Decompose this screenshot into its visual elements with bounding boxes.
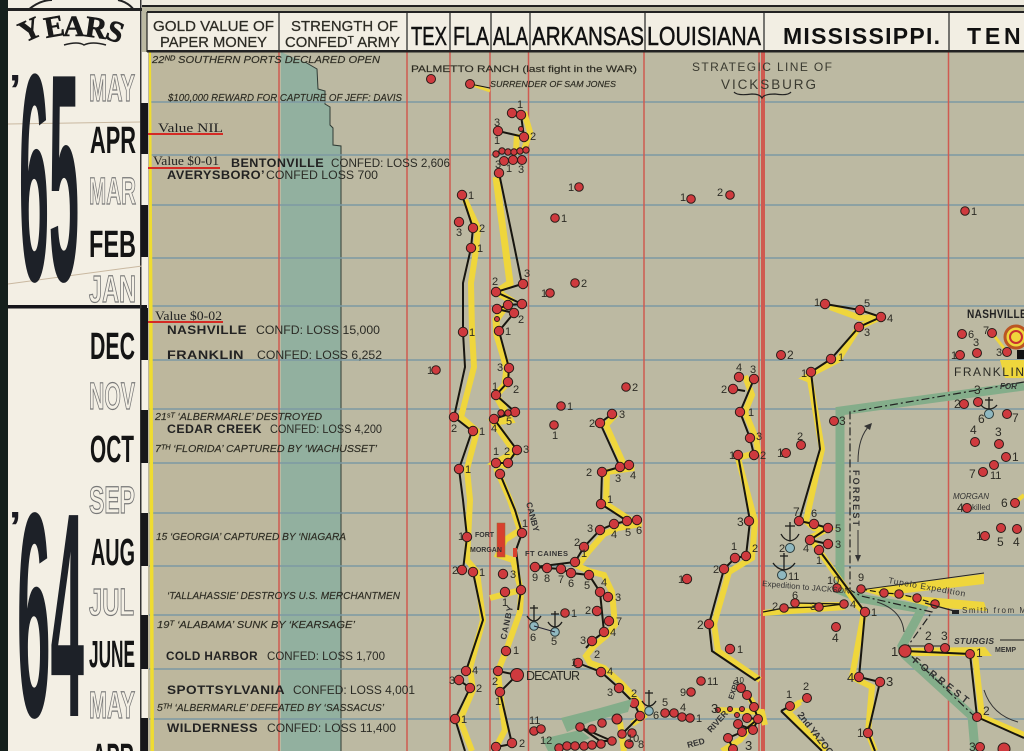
Mississippi campaign track: 4 — [803, 543, 809, 555]
green Forrest band, Arkansas lower: 11 — [529, 715, 540, 727]
Sturgis route and Memphis line: STURGIS — [954, 636, 994, 646]
Louisiana campaign track: 2 — [697, 618, 704, 632]
Tennessee engagements and Nashville: 3 — [974, 383, 981, 397]
Mississippi campaign track: 1 — [814, 297, 820, 309]
Arkansas campaign track: 4 — [610, 627, 616, 639]
year numeral 1865: ’ — [9, 66, 21, 115]
Louisiana campaign track: 2 — [713, 564, 719, 576]
Red River expedition cluster: 9 — [680, 687, 686, 699]
battle and naval notes: CONFD: LOSS 15,000 — [256, 323, 380, 337]
Tennessee engagements and Nashville: 3 — [996, 347, 1002, 359]
left years panel — [0, 0, 148, 751]
Florida campaign track: 4 — [472, 665, 478, 677]
Sturgis route and Memphis line: 1 — [976, 646, 983, 660]
Arkansas campaign track — [530, 409, 645, 734]
strength of Confederate army column — [281, 52, 341, 751]
Louisiana campaign track: 3 — [756, 431, 762, 443]
Arkansas scattered engagements: 2 — [581, 278, 587, 290]
Arkansas campaign track: 5 — [584, 580, 590, 592]
2nd Yazoo route: 1 — [786, 689, 792, 701]
column header row: ARKANSAS — [532, 21, 644, 51]
Arkansas campaign track: 2 — [631, 688, 637, 700]
Arkansas scattered engagements: 1 — [541, 288, 547, 300]
Red River expedition cluster: 1 — [696, 713, 702, 725]
month labels: MAR — [89, 171, 136, 213]
Tennessee engagements and Nashville: killed — [972, 503, 990, 512]
battle and naval notes: SPOTTSYLVANIA — [167, 683, 285, 697]
Alabama campaign track: 2 — [504, 446, 510, 458]
Sturgis route and Memphis line: 2 — [983, 704, 990, 718]
Louisiana campaign track: 1 — [729, 450, 735, 462]
Arkansas scattered engagements: 1 — [561, 213, 567, 225]
Florida campaign track: 1 — [469, 327, 475, 339]
Mississippi campaign track: 5 — [864, 298, 870, 310]
Tennessee engagements and Nashville: 4 — [970, 423, 977, 437]
battle and naval notes: BENTONVILLE — [231, 156, 324, 170]
battle and naval notes: COLD HARBOR — [166, 649, 258, 663]
Palmetto Ranch note: SURRENDER OF SAM JONES — [490, 79, 616, 89]
Expedition to Jackson: 2 — [772, 601, 778, 613]
battle and naval notes: CONFED: LOSS 4,200 — [270, 422, 382, 436]
Arkansas campaign track: 3 — [607, 687, 613, 699]
Mississippi campaign track: 5 — [835, 523, 841, 535]
Arkansas scattered engagements: 1 — [567, 401, 573, 413]
column header row: GOLD VALUE OF — [153, 18, 274, 35]
Tennessee engagements and Nashville: 6 — [968, 329, 974, 341]
month grid lines — [149, 102, 1024, 719]
Mississippi campaign track: 1 — [816, 555, 822, 567]
Arkansas campaign track: 5 — [625, 527, 631, 539]
month labels: MAY — [89, 685, 135, 727]
Arkansas campaign track: 1 — [607, 494, 613, 506]
Expedition to Jackson — [762, 575, 856, 616]
Alabama campaign track: 1 — [493, 446, 499, 458]
Mississippi campaign track: 4 — [887, 313, 893, 325]
Louisiana campaign track: 1 — [678, 574, 684, 586]
Tennessee engagements and Nashville: 4 — [957, 501, 964, 515]
battle and naval notes: CONFED LOSS 700 — [266, 168, 378, 182]
Alabama campaign track: 1 — [513, 645, 519, 657]
Florida campaign track — [449, 190, 485, 751]
green Forrest band, Arkansas lower: 10 — [627, 733, 639, 745]
Fort Morgan and Fort Gaines: FT CAINES — [525, 549, 568, 558]
Alabama campaign track: 2 — [519, 738, 525, 750]
Mississippi scattered engagements and naval anchors — [773, 206, 977, 645]
Tupelo expedition: 9 — [858, 572, 864, 584]
year numeral 1865 — [9, 12, 79, 343]
Palmetto Ranch note — [411, 64, 637, 91]
Expedition to Jackson: 4 — [850, 599, 856, 611]
Arkansas campaign track: 4 — [630, 470, 636, 482]
Mississippi scattered engagements and naval anchors: 4 — [832, 631, 839, 645]
Forrest route, green band: FORREST — [910, 656, 971, 706]
battle and naval notes — [151, 54, 450, 735]
Mississippi campaign track — [793, 297, 893, 751]
Sturgis route and Memphis line: 2 — [925, 629, 932, 643]
2nd Yazoo route — [781, 681, 835, 751]
Louisiana campaign track: 2 — [752, 543, 758, 555]
Red River expedition cluster: 6 — [653, 710, 659, 722]
Florida campaign track: 3 — [456, 227, 462, 239]
Mississippi scattered engagements and naval anchors: 2 — [779, 543, 785, 555]
Arkansas campaign track: 3 — [619, 409, 625, 421]
Alabama campaign track: CANBY — [498, 605, 515, 640]
Arkansas campaign track: 3 — [587, 523, 593, 535]
Mississippi campaign track: 6 — [811, 508, 817, 520]
Tennessee engagements and Nashville: 7 — [1012, 411, 1019, 425]
Expedition to Jackson: 10 — [827, 575, 839, 587]
month labels — [89, 68, 136, 751]
Tennessee engagements and Nashville: FOR — [1000, 382, 1017, 391]
Arkansas campaign track: 7 — [616, 616, 622, 628]
Arkansas campaign track: 2 — [574, 537, 580, 549]
Alabama campaign track: 3 — [510, 569, 516, 581]
Alabama campaign track: DECATUR — [526, 669, 580, 683]
battle and naval notes: AVERYSBORO’ — [167, 168, 265, 182]
column header row: TEX — [411, 21, 447, 51]
month labels: MAY — [89, 68, 135, 110]
Mississippi campaign track: 3 — [864, 327, 870, 339]
Florida campaign track: 2 — [451, 423, 457, 435]
Sturgis route and Memphis line: 1 — [891, 644, 898, 659]
Mississippi scattered engagements and naval anchors: 2 — [797, 431, 803, 443]
month labels: APR — [90, 120, 136, 162]
Tennessee engagements and Nashville: 1 — [1012, 450, 1019, 464]
Alabama campaign track: 3 — [495, 159, 501, 171]
Arkansas scattered engagements: 5 — [551, 636, 557, 648]
Louisiana campaign track — [678, 187, 766, 680]
month labels: JUL — [89, 582, 134, 624]
Strategic line of Vicksburg label: VICKSBURG — [721, 77, 816, 92]
battle and naval notes: CEDAR CREEK — [167, 422, 262, 436]
Alabama campaign track: 1 — [492, 381, 498, 393]
Arkansas scattered engagements — [427, 182, 638, 735]
Louisiana campaign track: 1 — [731, 541, 737, 553]
2nd Yazoo route: 2 — [803, 681, 809, 693]
Alabama campaign track: 1 — [502, 597, 508, 609]
Alabama campaign track: 1 — [505, 326, 511, 338]
Arkansas campaign track: 8 — [544, 573, 550, 585]
Fort Morgan and Fort Gaines: MORGAN — [470, 547, 502, 554]
text: 65 — [19, 12, 79, 343]
battle and naval notes: WILDERNESS — [167, 721, 258, 735]
gold value notes and red markers: Value $0-02 — [155, 308, 222, 323]
Mississippi campaign track: 3 — [835, 539, 841, 551]
Red River expedition cluster: RED — [686, 736, 706, 750]
Tennessee engagements and Nashville: 3 — [973, 337, 979, 349]
Forrest route, green band — [840, 382, 1024, 751]
Alabama campaign track: 1 — [495, 696, 501, 708]
Alabama campaign track: 2 — [492, 676, 498, 688]
Florida campaign track: 2 — [476, 683, 482, 695]
Sturgis route and Memphis line: MEMP — [995, 647, 1016, 654]
battle and naval notes: 7ᵀᴴ ‘FLORIDA’ CAPTURED BY ‘WACHUSSET’ — [155, 443, 378, 455]
Florida campaign track: 1 — [468, 190, 474, 202]
Florida campaign track: 1 — [479, 426, 485, 438]
column header row: ALA — [493, 21, 528, 51]
battle and naval notes: CONFED: LOSS 4,001 — [293, 683, 415, 697]
Mississippi campaign track: 7 — [793, 505, 800, 519]
Fort Morgan and Fort Gaines: FORT — [475, 532, 495, 539]
Arkansas campaign track: 7 — [558, 574, 564, 586]
Red River expedition cluster: RIVER — [705, 708, 730, 734]
battle and naval notes: 19ᵀ ‘ALABAMA’ SUNK BY ‘KEARSAGE’ — [157, 619, 356, 631]
column header row: PAPER MONEY — [160, 34, 267, 51]
battle and naval notes: 5ᵀᴴ ‘ALBERMARLE’ DEFEATED BY ‘SASSACUS’ — [157, 702, 385, 714]
Mississippi campaign track: 1 — [838, 352, 844, 364]
Florida campaign track: 3 — [449, 675, 455, 687]
Tennessee engagements and Nashville: 7 — [969, 467, 976, 481]
Florida campaign track: 1 — [477, 243, 483, 255]
month tick bars — [141, 103, 148, 751]
Arkansas campaign track: 2 — [589, 418, 595, 430]
Tennessee engagements and Nashville: 11 — [990, 470, 1001, 482]
Tennessee engagements and Nashville: 6 — [1001, 496, 1008, 510]
state column lines — [279, 52, 948, 751]
title: YEARS: YEARS — [13, 9, 129, 50]
year numeral 1864: ’ — [9, 503, 21, 552]
Mississippi campaign track: 1 — [801, 368, 807, 380]
Alabama campaign track: 1 — [522, 518, 528, 530]
month labels: JAN — [89, 269, 136, 311]
battle and naval notes: ‘TALLAHASSIE’ DESTROYS U.S. MERCHANTMEN — [167, 590, 400, 602]
battle and naval notes: 22ᴺᴰ SOUTHERN PORTS DECLARED OPEN — [151, 54, 380, 66]
Red River expedition cluster: 10 — [735, 676, 744, 685]
Alabama campaign track: 2 — [518, 314, 524, 326]
Tennessee engagements and Nashville — [951, 307, 1024, 549]
Arkansas campaign track: 4 — [601, 577, 607, 589]
Mississippi scattered engagements and naval anchors: 3 — [839, 414, 846, 428]
Tennessee engagements and Nashville: 7 — [983, 325, 989, 337]
Tennessee engagements and Nashville: 6 — [978, 412, 985, 426]
Louisiana campaign track: 2 — [717, 187, 723, 199]
battle and naval notes: 21ˢᵀ ‘ALBERMARLE’ DESTROYED — [154, 411, 322, 423]
Red River expedition cluster: EXPD — [726, 678, 741, 701]
battle and naval notes: FRANKLIN — [167, 348, 244, 362]
column header row: LOUISIANA — [647, 21, 762, 51]
Mississippi campaign track: 4 — [847, 670, 854, 685]
Florida campaign track: 2 — [452, 565, 458, 577]
Arkansas campaign track: 2 — [586, 467, 592, 479]
month labels: SEP — [89, 480, 135, 522]
Louisiana campaign track: 3 — [737, 515, 744, 529]
Tupelo expedition: Tupelo Expedition — [888, 575, 966, 599]
battle and naval notes: CONFED: LOSS 1,700 — [267, 649, 385, 663]
battle and naval notes: 15 ‘GEORGIA’ CAPTURED BY ‘NIAGARA — [156, 531, 346, 543]
Fort Morgan and Fort Gaines — [470, 523, 568, 558]
Arkansas campaign track: 9 — [532, 572, 538, 584]
month labels: DEC — [90, 326, 135, 368]
column header row — [142, 5, 1024, 52]
Alabama campaign track: 3 — [524, 268, 530, 280]
Tennessee engagements and Nashville: MORGAN — [953, 492, 989, 501]
battle and naval notes: CONFED: LOSS 11,400 — [267, 721, 396, 735]
Arkansas scattered engagements: 1 — [571, 608, 577, 620]
column header row: FLA — [453, 21, 489, 51]
Forrest route, green band: FORREST — [851, 470, 861, 526]
Louisiana campaign track: 3 — [750, 364, 756, 376]
column header row: CONFEDᵀ ARMY — [285, 34, 400, 51]
Mississippi scattered engagements and naval anchors: 11 — [788, 571, 799, 583]
Alabama campaign track: 3 — [518, 164, 524, 176]
Sturgis route and Memphis line — [891, 629, 1024, 751]
month labels: FEB — [89, 224, 136, 266]
Mississippi campaign track: 1 — [857, 726, 864, 740]
Expedition to Jackson: 6 — [792, 590, 798, 602]
Arkansas campaign track: 6 — [568, 578, 574, 590]
Expedition to Jackson: Expedition to JACKSON — [762, 579, 850, 596]
Alabama campaign track — [489, 99, 580, 751]
Tennessee engagements and Nashville: 5 — [997, 535, 1004, 549]
column header row: MISSISSIPPI. — [783, 23, 940, 49]
Mississippi scattered engagements and naval anchors: 1 — [777, 446, 784, 460]
Louisiana campaign track: 1 — [680, 192, 686, 204]
battle and naval notes: NASHVILLE — [167, 323, 247, 337]
Florida campaign track: 1 — [479, 567, 485, 579]
month labels: NOV — [89, 376, 135, 418]
Tupelo expedition — [857, 572, 1024, 615]
Louisiana campaign track: 2 — [760, 450, 766, 462]
Louisiana campaign track: 1 — [748, 407, 754, 419]
Red River expedition cluster — [642, 676, 765, 751]
Alabama campaign track: 1 — [517, 99, 523, 111]
Tennessee engagements and Nashville: 3 — [995, 425, 1002, 439]
Red River expedition cluster: 5 — [662, 697, 668, 709]
Florida campaign track: 1 — [465, 464, 471, 476]
Alabama campaign track: 3 — [497, 362, 503, 374]
gold value notes and red markers — [148, 120, 223, 323]
Florida campaign track: 2 — [479, 223, 485, 235]
Arkansas campaign track: 2 — [585, 605, 591, 617]
year numeral 1864 — [9, 452, 84, 751]
month labels: OCT — [90, 429, 134, 471]
battle and naval notes: $100,000 REWARD FOR CAPTURE OF JEFF: DAVIS — [167, 92, 402, 104]
Tennessee engagements and Nashville: 4 — [1013, 535, 1020, 549]
Tennessee engagements and Nashville: 2 — [954, 397, 961, 411]
Alabama campaign track: 1 — [506, 163, 512, 175]
Alabama campaign track: 2 — [530, 131, 536, 143]
Tennessee engagements and Nashville: 1 — [951, 350, 957, 362]
Arkansas campaign track: 4 — [607, 666, 613, 678]
Alabama campaign track: 3 — [523, 444, 529, 456]
green Forrest band, Arkansas lower: 12 — [540, 735, 552, 747]
gold value notes and red markers: Value $0-01 — [153, 153, 219, 168]
Red River expedition cluster: 11 — [707, 676, 718, 688]
Alabama campaign track: 2 — [492, 276, 498, 288]
green Forrest band, Arkansas lower: 8 — [638, 739, 644, 751]
Red River expedition cluster: 3 — [711, 701, 718, 716]
Arkansas campaign track: 3 — [615, 473, 621, 485]
Strategic line of Vicksburg label: STRATEGIC LINE OF — [692, 60, 832, 74]
yellow margin strip — [150, 52, 154, 751]
Arkansas campaign track: 1 — [581, 548, 587, 560]
text: JUNE — [89, 634, 135, 676]
Arkansas scattered engagements: 1 — [568, 182, 574, 194]
Tennessee engagements and Nashville: FRANKLIN — [954, 365, 1024, 379]
Arkansas campaign track: 6 — [636, 525, 642, 537]
Mississippi scattered engagements and naval anchors: 2 — [787, 348, 794, 362]
Louisiana campaign track: 2 — [721, 384, 727, 396]
Alabama campaign track: 4 — [491, 423, 497, 435]
Florida campaign track: 1 — [458, 531, 464, 543]
Strategic line of Vicksburg label — [692, 60, 832, 98]
Florida campaign track: 1 — [461, 714, 467, 726]
Mississippi campaign track: 3 — [886, 674, 893, 689]
Arkansas campaign track: 1 — [571, 657, 577, 669]
Mississippi campaign track: 1 — [871, 607, 877, 619]
Arkansas scattered engagements: 6 — [530, 632, 536, 644]
Alabama campaign track: 3 — [494, 117, 500, 129]
Tennessee engagements and Nashville: 1 — [976, 529, 983, 543]
month labels: AUG — [91, 532, 135, 574]
battle and naval notes: CONFED: LOSS 6,252 — [257, 348, 382, 362]
Red River expedition cluster: 4 — [680, 702, 686, 714]
Arkansas scattered engagements: 2 — [632, 382, 638, 394]
gold value notes and red markers: Value NIL — [158, 120, 223, 135]
battle and naval notes: CONFED: LOSS 2,606 — [331, 156, 450, 170]
Alabama campaign track: 2 — [513, 384, 519, 396]
Louisiana campaign track: 4 — [736, 362, 742, 374]
Arkansas campaign track: 2 — [594, 649, 600, 661]
Arkansas campaign track: 4 — [611, 529, 617, 541]
Arkansas campaign track: 3 — [580, 635, 586, 647]
Arkansas scattered engagements: 1 — [427, 365, 433, 377]
Alabama campaign track: CANBY — [524, 501, 542, 533]
Arkansas campaign track: 3 — [615, 592, 621, 604]
Expedition to Jackson: 3 — [810, 601, 816, 613]
Sturgis route and Memphis line: 3 — [941, 629, 948, 643]
Alabama campaign track: 5 — [506, 416, 512, 428]
Arkansas scattered engagements: 1 — [552, 430, 558, 442]
column header row: STRENGTH OF — [291, 18, 398, 35]
green Forrest band, Arkansas lower — [529, 699, 644, 751]
Alabama campaign track: 1 — [494, 135, 500, 147]
Palmetto Ranch note: PALMETTO RANCH (last fight in the WAR) — [411, 64, 637, 75]
Louisiana campaign track: 1 — [737, 644, 743, 656]
Mississippi scattered engagements and naval anchors: 1 — [971, 206, 977, 218]
ornament above years title — [28, 0, 134, 10]
